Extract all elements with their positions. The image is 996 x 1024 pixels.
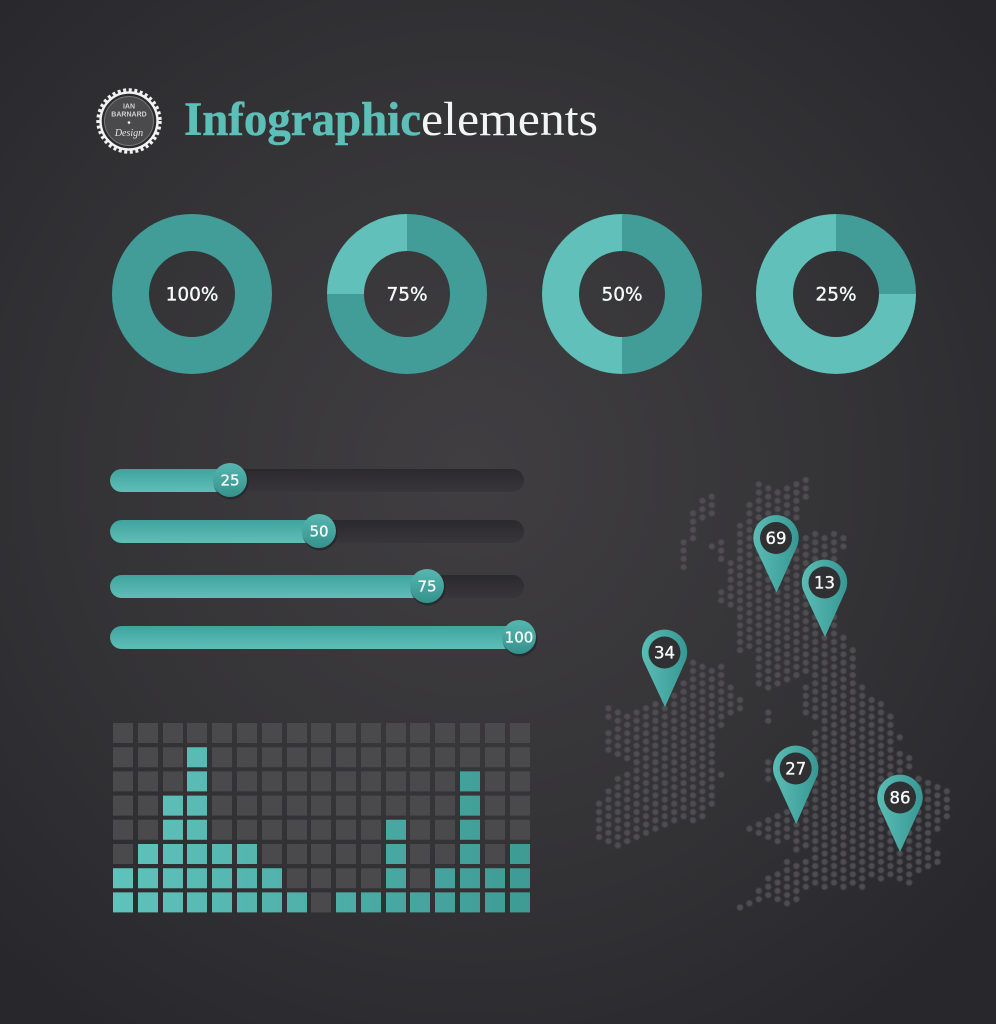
donut: 50%	[561, 232, 683, 356]
map pin: 27	[773, 746, 818, 824]
donut: 25%: 25%	[815, 284, 857, 306]
donut: 50%: 50%	[601, 284, 643, 306]
dotted map of UK and Ireland	[599, 480, 947, 908]
map pin: 69: 69	[766, 529, 786, 548]
slider: 25	[110, 463, 524, 500]
block chart: background grid	[113, 723, 530, 912]
slider: 25: 25	[220, 472, 240, 490]
slider: 100	[110, 620, 538, 656]
map pin: 13: 13	[814, 574, 835, 592]
map pin: 27: 27	[785, 760, 806, 778]
slider: 50: 50	[309, 522, 329, 540]
donut: 100%: 100%	[166, 284, 218, 306]
donut: 75%	[346, 232, 468, 356]
donut: 100%	[130, 232, 254, 356]
logo badge: Design	[114, 128, 143, 139]
map pin: 34	[642, 630, 687, 707]
slider: 100: 100	[505, 628, 533, 646]
logo badge: IAN	[123, 104, 135, 110]
map pin: 86: 86	[890, 788, 910, 808]
logo badge: BARNARD	[111, 112, 147, 118]
title: Infographic	[184, 94, 421, 146]
map pin: 13	[802, 560, 847, 637]
slider: 75	[110, 569, 524, 606]
slider: 75: 75	[417, 578, 437, 596]
map pin: 69	[753, 515, 799, 592]
map pin: 34: 34	[654, 644, 675, 662]
logo badge	[98, 90, 160, 152]
block chart: teal columns	[113, 747, 530, 912]
donut: 75%: 75%	[386, 284, 428, 306]
map pin: 86	[877, 775, 923, 852]
slider: 50	[110, 514, 524, 550]
title	[184, 93, 598, 146]
donut: 25%	[774, 232, 898, 356]
title: elements	[421, 93, 598, 146]
